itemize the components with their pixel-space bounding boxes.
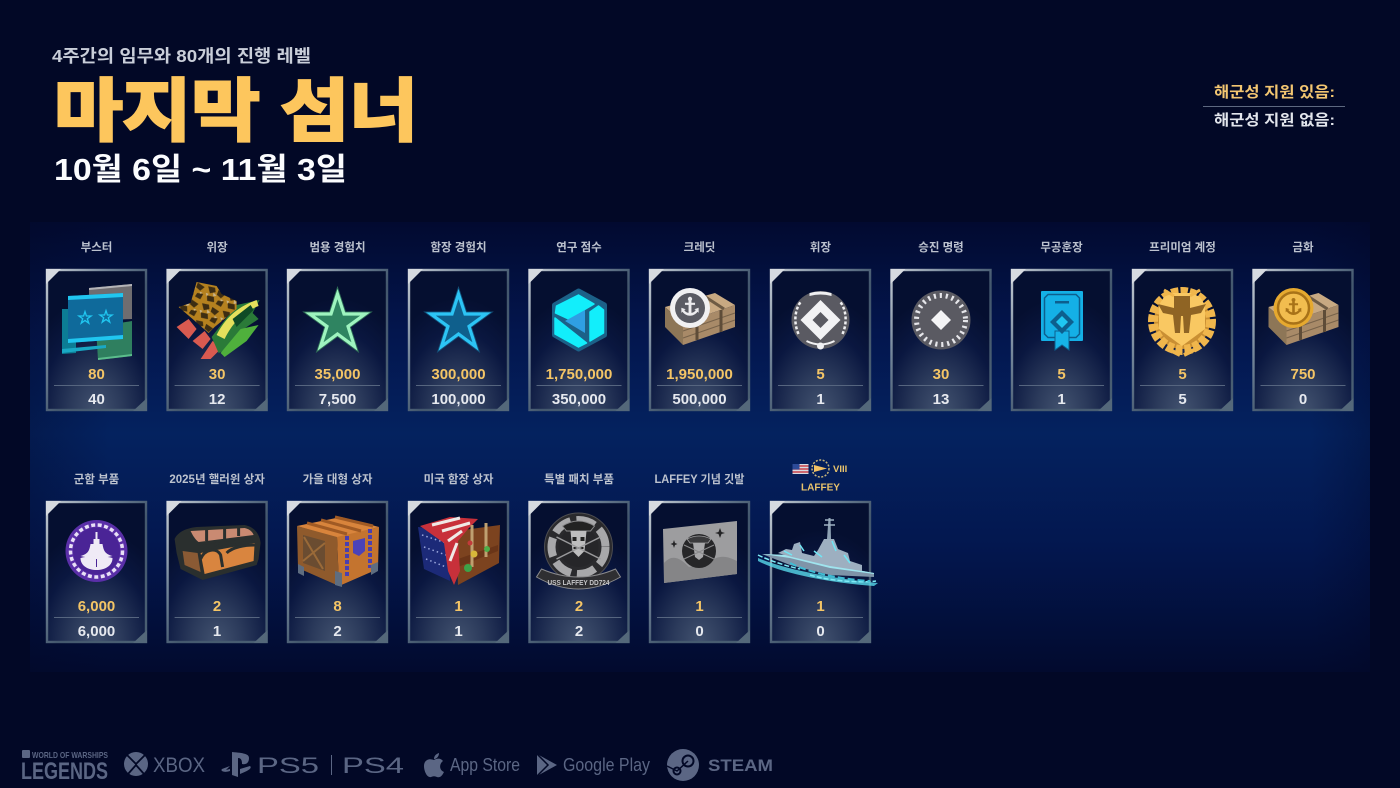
value without support: 1: [213, 623, 221, 640]
icon: gold laurel shield: [1153, 290, 1211, 355]
value without support: 1: [1057, 391, 1066, 408]
value with support: 30: [933, 366, 949, 383]
value with support: 5: [1057, 366, 1066, 383]
date range: 10월 6일 ~ 11월 3일: [54, 152, 347, 187]
logo: steam: [667, 749, 773, 781]
reward: ship xp: [408, 240, 509, 411]
reward: promotion orders: [890, 241, 992, 411]
label: 함장 경험치: [430, 240, 487, 254]
value without support: 6,000: [78, 623, 115, 640]
reward: autumn big crate: [287, 472, 388, 643]
value without support: 500,000: [672, 391, 727, 408]
value without support: 0: [695, 623, 704, 640]
logo: app store: [424, 753, 520, 777]
value without support: 12: [209, 391, 225, 408]
icon: certificate: [1041, 291, 1083, 350]
icon: wreath emblem: [792, 291, 850, 350]
footer: platform logos: [21, 749, 773, 785]
label: 2025년 핼러윈 상자: [169, 472, 265, 486]
reward: booster: [46, 241, 147, 411]
value with support: 300,000: [431, 366, 486, 383]
icon: blue star: [431, 294, 486, 346]
value without support: 40: [88, 391, 105, 408]
logo: playstation 5 and 4: PS5: [257, 753, 319, 778]
logo: google play: [537, 754, 650, 776]
icon: destroyer class wreath: [812, 460, 829, 477]
value with support: 30: [209, 366, 225, 383]
icon: us flag: [792, 464, 808, 474]
label: 휘장: [810, 240, 831, 254]
label: 프리미엄 계정: [1149, 240, 1216, 254]
legend: [1203, 84, 1345, 129]
logo: world of warships legends: [21, 750, 108, 785]
value with support: 1,750,000: [546, 366, 612, 383]
value with support: 2: [213, 598, 221, 615]
icon: purple gear ship: [66, 520, 128, 582]
value with support: 1: [454, 598, 463, 615]
label: LAFFEY 기념 깃발: [654, 472, 745, 486]
logo: app store: App Store: [450, 755, 520, 775]
logo: steam: STEAM: [708, 756, 773, 775]
label: 가을 대형 상자: [303, 472, 373, 486]
icon: credit crate: [665, 288, 735, 345]
value without support: 5: [1178, 391, 1187, 408]
label: 금화: [1292, 240, 1314, 254]
icon: destroyer ship: [758, 518, 878, 586]
label: 범용 경험치: [309, 240, 366, 254]
reward: special patch: [528, 472, 630, 643]
value with support: 80: [88, 366, 105, 383]
value with support: 35,000: [315, 366, 360, 383]
value without support: 13: [933, 391, 949, 408]
logo: world of warships legends: WORLD OF WARSHIPS: [32, 750, 108, 760]
value without support: 2: [333, 623, 342, 640]
value with support: 6,000: [78, 598, 115, 615]
logo: google play: Google Play: [563, 755, 650, 775]
reward: american ship container: [408, 472, 509, 643]
icon: doubloon crate: [1268, 288, 1338, 345]
logo: xbox: XBOX: [153, 754, 205, 777]
label: 연구 점수: [556, 241, 602, 254]
icon: green star: [310, 294, 365, 346]
legend: without naval base support: 해군성 지원 없음:: [1214, 112, 1335, 129]
icon: commemorative flag: [663, 521, 737, 583]
value with support: 750: [1290, 366, 1316, 383]
reward: credits: [649, 240, 750, 411]
icon: laffey patch: USS LAFFEY DD724: [548, 580, 610, 587]
value with support: 1: [695, 598, 704, 615]
logo: world of warships legends: LEGENDS: [21, 758, 108, 785]
value without support: 100,000: [431, 391, 486, 408]
icon: booster flags: [62, 284, 132, 360]
reward: halloween container: [167, 472, 268, 643]
icon: laffey patch: [536, 513, 620, 589]
value without support: 0: [816, 623, 825, 640]
reward: research points: [528, 241, 630, 411]
label: 무공훈장: [1040, 241, 1083, 254]
label: 승진 명령: [918, 241, 964, 254]
icon: hexagon: [554, 291, 604, 349]
reward: camouflage: [167, 241, 268, 411]
label: 특별 패치 부품: [544, 472, 614, 486]
logo: xbox: [124, 752, 205, 777]
label: 미국 함장 상자: [424, 472, 494, 486]
reward: emblem: [770, 240, 871, 411]
reward: merit medal: [1011, 241, 1112, 411]
value without support: 2: [575, 623, 583, 640]
reward: doubloons: [1252, 240, 1354, 411]
label: 군함 부품: [74, 472, 120, 486]
reward: laffey ship: [758, 460, 878, 643]
value with support: 1,950,000: [666, 366, 733, 383]
value without support: 7,500: [319, 391, 356, 408]
icon: camouflage patterns: [177, 282, 260, 359]
ship header: [792, 460, 847, 494]
value with support: 1: [816, 598, 825, 615]
title: 마지막 섬너: [54, 74, 418, 150]
reward: premium account: [1132, 240, 1233, 411]
logo: playstation 5 and 4: [221, 752, 404, 778]
icon: us flag crate: [418, 517, 500, 585]
logo: playstation 5 and 4: PS4: [342, 753, 404, 778]
value without support: 1: [816, 391, 825, 408]
icon: halloween chest: [175, 525, 261, 580]
value without support: 1: [454, 623, 463, 640]
value with support: 2: [575, 598, 583, 615]
icon: promotion badge: [912, 290, 970, 350]
panel: rewards band: [0, 222, 1370, 672]
reward: elite commander xp: [287, 240, 388, 411]
label: 크레딧: [684, 240, 715, 254]
value with support: 5: [1178, 366, 1187, 383]
subtitle: 4주간의 임무와 80개의 진행 레벨: [52, 46, 311, 66]
label: 부스터: [81, 241, 112, 254]
label: 위장: [207, 241, 228, 254]
reward: laffey commemorative flag: [649, 472, 750, 643]
value with support: 8: [333, 598, 342, 615]
value without support: 350,000: [552, 391, 606, 408]
ship name: LAFFEY: [801, 482, 840, 494]
legend: with naval base support: 해군성 지원 있음:: [1214, 84, 1335, 101]
value without support: 0: [1299, 391, 1307, 408]
icon: autumn crate: [297, 517, 379, 587]
tier VIII: VIII: [833, 464, 847, 475]
reward: warship parts: [46, 472, 147, 643]
value with support: 5: [816, 366, 825, 383]
